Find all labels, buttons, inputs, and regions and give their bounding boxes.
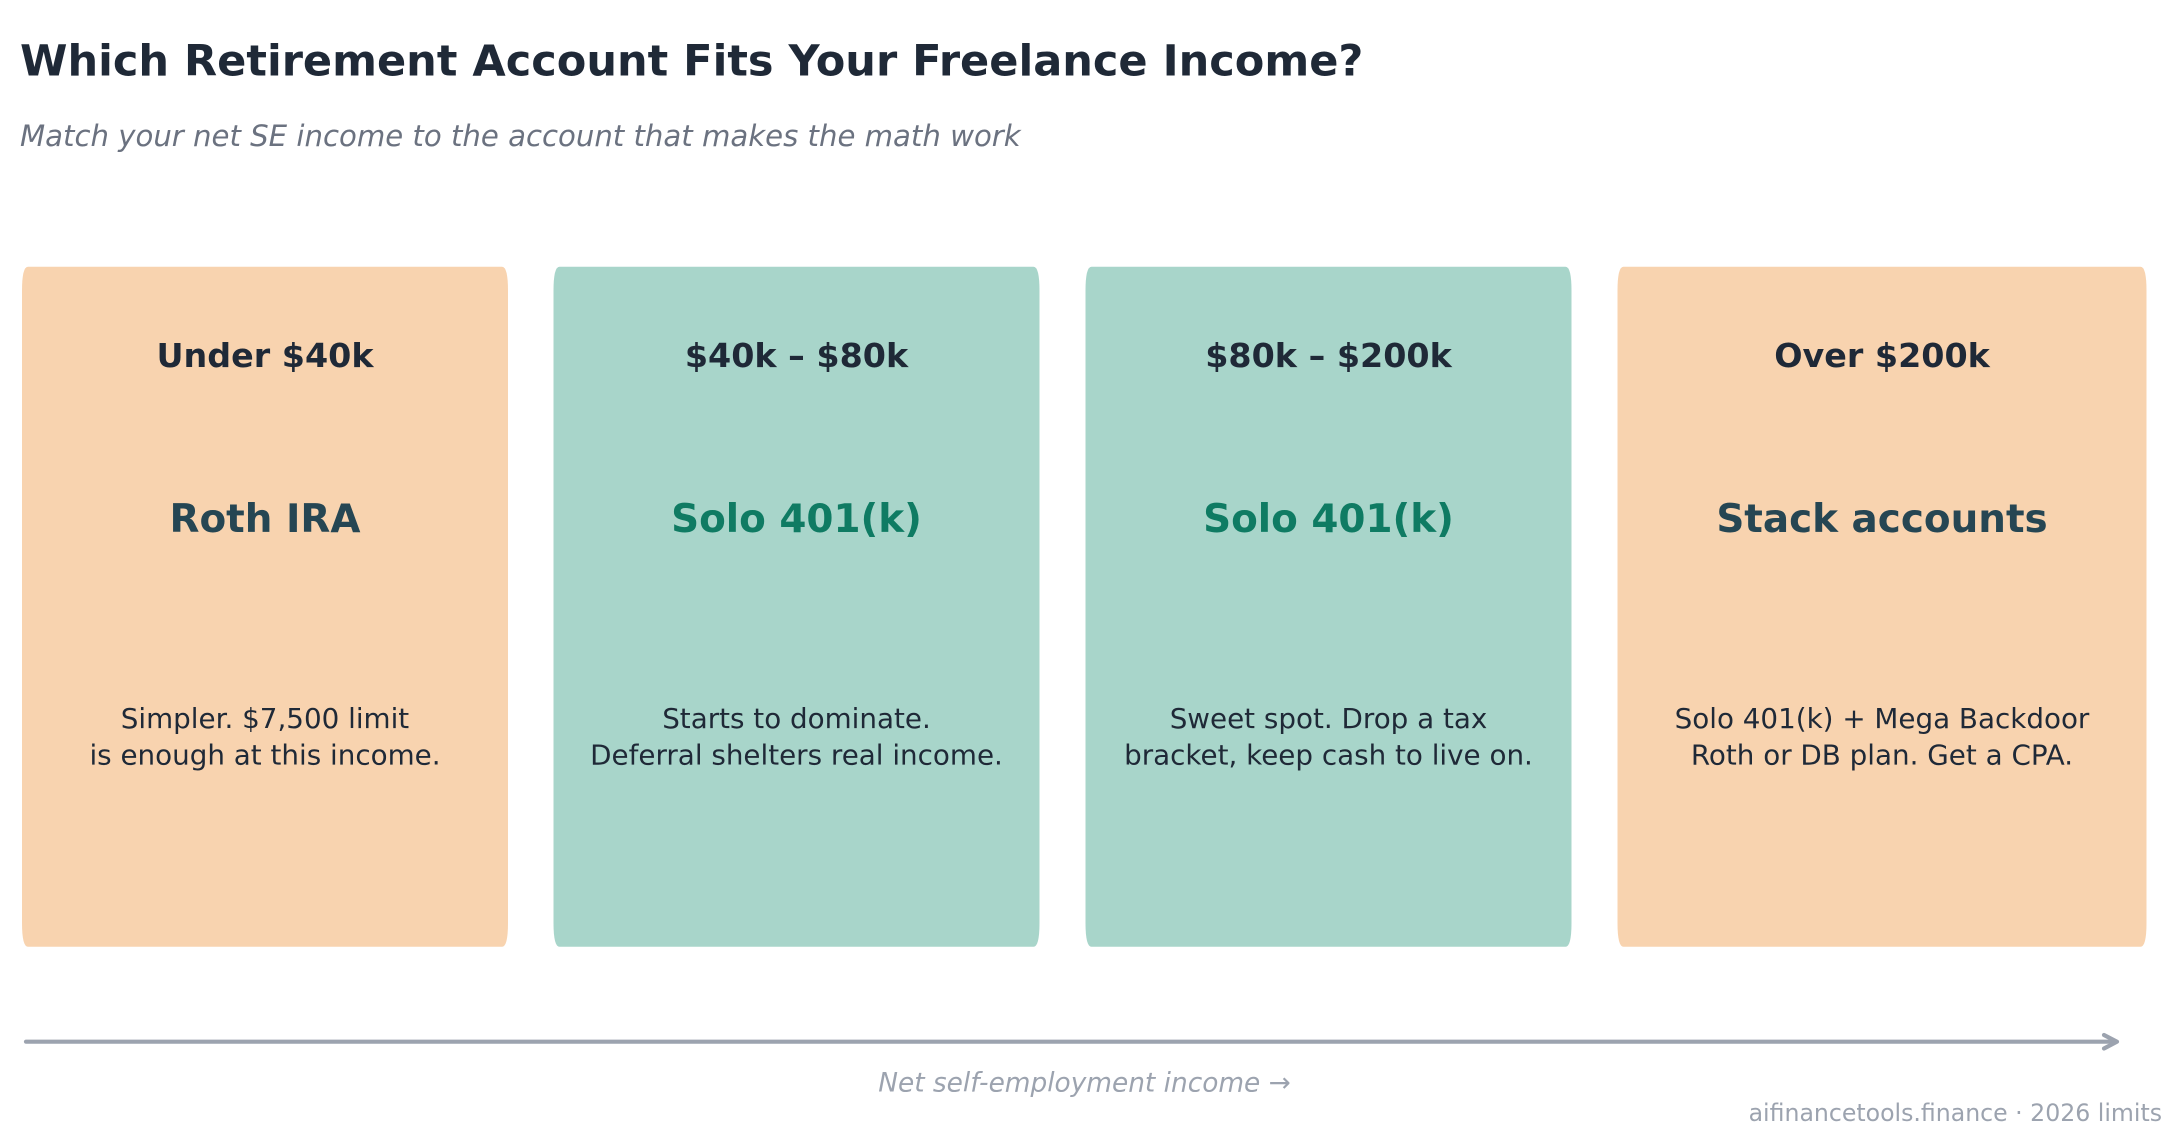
title: Which Retirement Account Fits Your Freelance Income? — [20, 36, 1363, 86]
account name: Solo 401(k) — [671, 497, 922, 542]
axis label: Net self-employment income → — [878, 1068, 1291, 1098]
description: Starts to dominate. — [662, 702, 931, 735]
panel: $80k to $200k — [1086, 267, 1572, 947]
account name: Stack accounts — [1716, 497, 2048, 542]
description: Sweet spot. Drop a tax — [1170, 702, 1487, 735]
income range: $40k – $80k — [685, 336, 909, 375]
description: is enough at this income. — [89, 738, 441, 772]
description: Deferral shelters real income. — [590, 738, 1003, 772]
account name: Roth IRA — [170, 497, 360, 542]
arrow: income axis — [26, 1035, 2117, 1048]
description: Simpler. $7,500 limit — [121, 702, 409, 735]
income range: Over $200k — [1774, 336, 1991, 375]
account name: Solo 401(k) — [1203, 497, 1454, 542]
subtitle: Match your net SE income to the account that makes the math work — [20, 119, 1022, 153]
income range: Under $40k — [156, 336, 374, 375]
description: bracket, keep cash to live on. — [1124, 738, 1533, 772]
description: Roth or DB plan. Get a CPA. — [1691, 738, 2073, 772]
source note: aifinancetools.finance · 2026 limits — [1749, 1099, 2162, 1127]
panel: $40k to $80k — [554, 267, 1040, 947]
panel: under $40k — [22, 267, 508, 947]
panel: over $200k — [1618, 267, 2146, 947]
income range: $80k – $200k — [1205, 336, 1453, 375]
description: Solo 401(k) + Mega Backdoor — [1675, 702, 2090, 735]
